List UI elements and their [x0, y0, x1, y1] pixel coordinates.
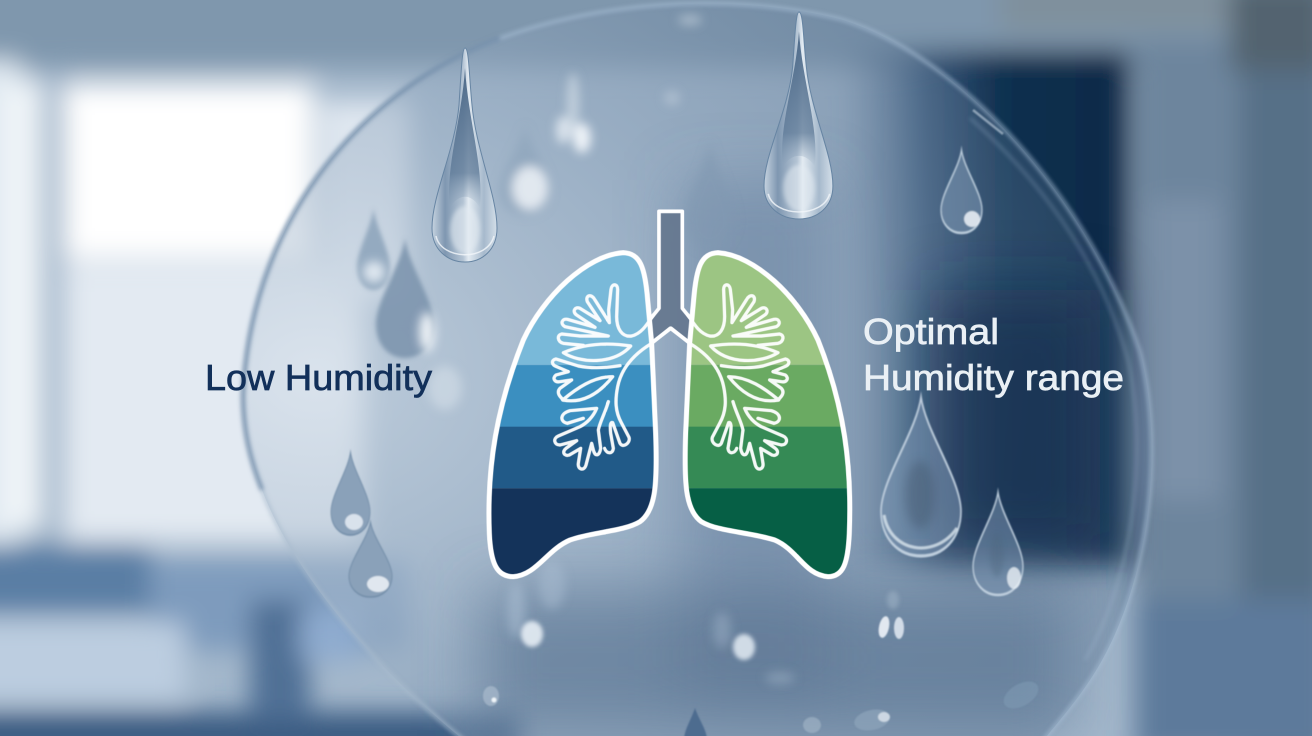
blurred background droplets — [357, 15, 904, 684]
label: Low Humidity: Low Humidity — [205, 357, 432, 398]
lungs illustration — [480, 211, 861, 582]
trachea and bronchi — [645, 211, 697, 347]
rim highlight — [973, 110, 1003, 134]
label: Optimal Humidity range — [863, 311, 1124, 398]
right lung — [682, 250, 853, 580]
left lung — [480, 247, 667, 582]
water drop: large top right — [764, 12, 833, 219]
water drops: left pair — [331, 452, 392, 597]
water drop: large right — [881, 397, 961, 556]
water drop: upper right — [941, 150, 982, 233]
left bronchial tree — [552, 285, 670, 469]
water drop: lower right — [973, 492, 1023, 595]
right bronchial tree — [671, 285, 789, 469]
glass bubble — [243, 4, 1152, 736]
small droplets along the lower rim — [483, 676, 1043, 736]
label: Optimal Humidity range: Optimal — [863, 311, 999, 352]
water drop: large left — [432, 48, 497, 262]
label: Optimal Humidity range: Humidity range — [863, 357, 1124, 398]
